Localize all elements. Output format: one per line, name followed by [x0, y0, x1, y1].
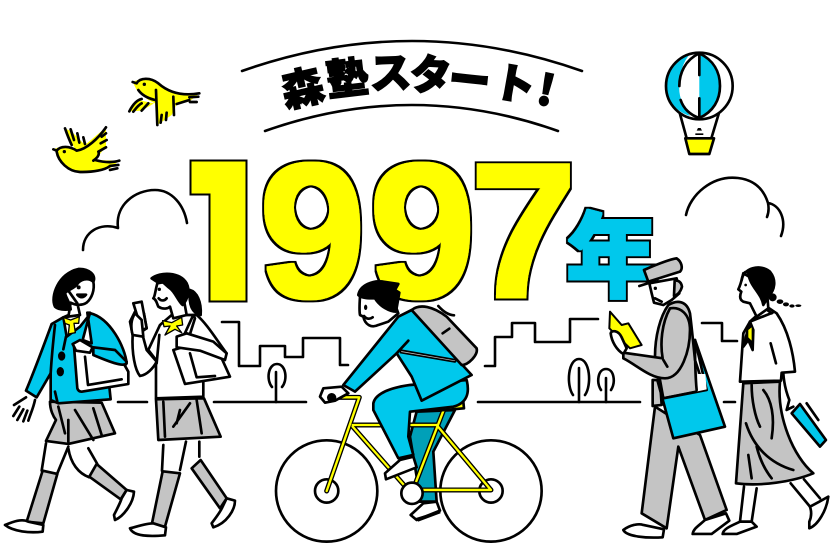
- heading arc bottom: [265, 105, 558, 131]
- person: girl with phone: [130, 274, 235, 536]
- neckerchief: [743, 322, 753, 350]
- skirt: [46, 402, 115, 444]
- blazer: [26, 313, 127, 403]
- heading arc top: [242, 41, 582, 71]
- ribbon: [63, 317, 79, 334]
- cloud: left: [83, 190, 187, 250]
- skyline right: [485, 319, 737, 366]
- back leg: [195, 442, 203, 457]
- trees: [269, 359, 614, 402]
- arm: [623, 308, 690, 378]
- face and hair: [359, 293, 398, 326]
- saddle: [433, 402, 464, 411]
- heading: [275, 39, 561, 120]
- heading: ー: [446, 45, 494, 110]
- blouse: [148, 315, 227, 398]
- skirt: [156, 398, 221, 440]
- heading: 森: [275, 52, 329, 120]
- ribbon: [163, 317, 183, 335]
- person: girl in sailor uniform: [723, 268, 828, 534]
- front leg: [162, 442, 186, 473]
- case and arm: [792, 404, 826, 447]
- front leg: [373, 380, 468, 458]
- trousers: [642, 407, 727, 528]
- cloud: right: [686, 178, 783, 236]
- bag: [173, 345, 230, 384]
- hand: [320, 387, 348, 403]
- person: girl in blazer: [5, 269, 134, 532]
- legs: [740, 479, 820, 522]
- heading: ト: [489, 48, 541, 115]
- skyline left: [222, 322, 348, 366]
- coat: [653, 302, 705, 406]
- bag: [74, 343, 128, 392]
- arm and hand: [130, 312, 157, 376]
- bag: [657, 340, 725, 438]
- bird: upper: [129, 79, 199, 125]
- blouse: [740, 307, 795, 382]
- year kanji: 年: [566, 182, 659, 317]
- wheels: [276, 440, 377, 542]
- bird: lower: [53, 127, 119, 172]
- back leg: [68, 448, 97, 477]
- person: man with book: [609, 258, 729, 538]
- braid: [769, 293, 801, 308]
- horizon line: [118, 401, 735, 403]
- frame: [327, 397, 491, 493]
- year 1997: 1997: [158, 123, 577, 338]
- year 1997: [190, 160, 572, 302]
- book: [609, 312, 642, 348]
- heading: !: [532, 56, 561, 119]
- person: cyclist with bicycle: [276, 281, 542, 542]
- jacket: [343, 310, 472, 401]
- front leg: [43, 443, 68, 474]
- hand: [13, 397, 35, 421]
- heading: ス: [368, 39, 412, 102]
- ponytail, hair, face: [190, 290, 201, 315]
- hair and face: [63, 278, 94, 317]
- backpack: [412, 307, 477, 365]
- face and cap: [649, 278, 679, 305]
- skirt: [736, 382, 813, 484]
- heading: タ: [408, 41, 453, 104]
- back leg: [410, 410, 455, 502]
- hand: [611, 331, 627, 354]
- balloon: [666, 53, 733, 154]
- face and hair: [738, 273, 768, 317]
- heading: 塾: [322, 43, 371, 108]
